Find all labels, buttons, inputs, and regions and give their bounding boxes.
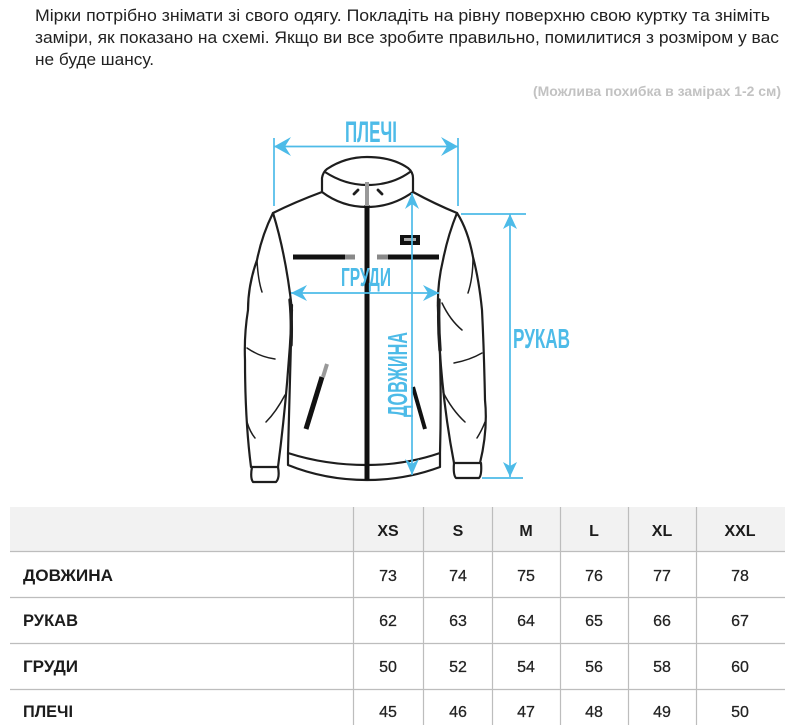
lower pocket left xyxy=(306,377,322,429)
row: length: 76 xyxy=(585,568,603,585)
row: sleeve: 64 xyxy=(517,613,535,630)
right sleeve xyxy=(438,213,486,463)
header row xyxy=(377,523,756,540)
row: chest xyxy=(23,657,749,676)
header row: XXL xyxy=(724,523,756,540)
row: length: 74 xyxy=(449,568,467,585)
left cuff xyxy=(251,467,279,482)
sleeve arrowheads xyxy=(503,214,517,477)
chest pocket left xyxy=(293,254,345,260)
measurement error note: (Можлива похибка в замірах 1-2 см) xyxy=(533,84,781,99)
table header background xyxy=(10,507,785,551)
collar xyxy=(322,157,413,207)
intro text xyxy=(35,7,779,69)
row: sleeve: 66 xyxy=(653,613,671,630)
row: length: 73 xyxy=(379,568,397,585)
length label: ДОВЖИНА xyxy=(382,332,413,417)
header row: S xyxy=(453,523,464,540)
header row: XS xyxy=(377,523,399,540)
intro text: Мірки потрібно знімати зі свого одягу. Покладіть на рівну поверхню свою куртку та зніміть xyxy=(35,7,770,25)
shoulder label: ПЛЕЧІ xyxy=(345,116,397,149)
row: shoulders xyxy=(23,702,749,721)
row: chest: 56 xyxy=(585,659,603,676)
row: shoulders: 46 xyxy=(449,704,467,721)
row: shoulders: 50 xyxy=(731,704,749,721)
row: sleeve: РУКАВ xyxy=(23,611,78,630)
zip pull xyxy=(365,182,369,206)
length arrowheads xyxy=(405,193,419,475)
lower pocket left zip pull xyxy=(323,364,327,377)
row: chest: 54 xyxy=(517,659,535,676)
collar snaps xyxy=(354,190,382,194)
chest pocket right zip end xyxy=(377,254,388,260)
table grid xyxy=(10,507,785,725)
chest pocket left zip end xyxy=(345,254,355,260)
jacket diagram xyxy=(245,157,486,482)
chest logo patch xyxy=(400,235,420,245)
sleeve label: РУКАВ xyxy=(513,323,570,354)
shoulder arrowheads xyxy=(274,137,458,156)
row: chest: 60 xyxy=(731,659,749,676)
logo mark xyxy=(404,238,416,241)
row: length: 78 xyxy=(731,568,749,585)
sleeve wrinkles xyxy=(247,257,485,438)
row: shoulders: 48 xyxy=(585,704,603,721)
intro text: не буде шансу. xyxy=(35,51,154,69)
row: sleeve: 63 xyxy=(449,613,467,630)
row: length xyxy=(23,566,749,585)
row: chest: 58 xyxy=(653,659,671,676)
size table xyxy=(10,507,785,725)
intro text: заміри, як показано на схемі. Якщо ви все зробите правильно, помилитися з розміром у вас xyxy=(35,29,779,47)
jacket body sides and hem xyxy=(288,305,441,480)
row: chest: ГРУДИ xyxy=(23,657,78,676)
header row: M xyxy=(519,523,533,540)
lower pocket right xyxy=(413,387,425,429)
shoulders xyxy=(273,192,457,213)
row: length: 77 xyxy=(653,568,671,585)
header row: L xyxy=(589,523,599,540)
left sleeve xyxy=(245,213,292,467)
header row: XL xyxy=(652,523,672,540)
row: shoulders: 47 xyxy=(517,704,535,721)
shoulder measurement xyxy=(274,137,458,206)
length measurement xyxy=(405,193,419,475)
row: sleeve: 62 xyxy=(379,613,397,630)
chest label: ГРУДИ xyxy=(341,262,391,292)
centre zip xyxy=(364,205,370,480)
row: shoulders: 49 xyxy=(653,704,671,721)
row: length: 75 xyxy=(517,568,535,585)
chest pocket right xyxy=(388,254,439,260)
chest arrowheads xyxy=(291,285,439,301)
sleeve measurement xyxy=(461,214,526,478)
chest measurement xyxy=(291,285,439,301)
right cuff xyxy=(454,463,481,478)
row: chest: 52 xyxy=(449,659,467,676)
row: length: ДОВЖИНА xyxy=(23,566,113,585)
side seam shading xyxy=(290,300,440,350)
row: sleeve: 67 xyxy=(731,613,749,630)
row: shoulders: 45 xyxy=(379,704,397,721)
row: sleeve xyxy=(23,611,749,630)
row: shoulders: ПЛЕЧІ xyxy=(23,702,73,721)
row: chest: 50 xyxy=(379,659,397,676)
row: sleeve: 65 xyxy=(585,613,603,630)
